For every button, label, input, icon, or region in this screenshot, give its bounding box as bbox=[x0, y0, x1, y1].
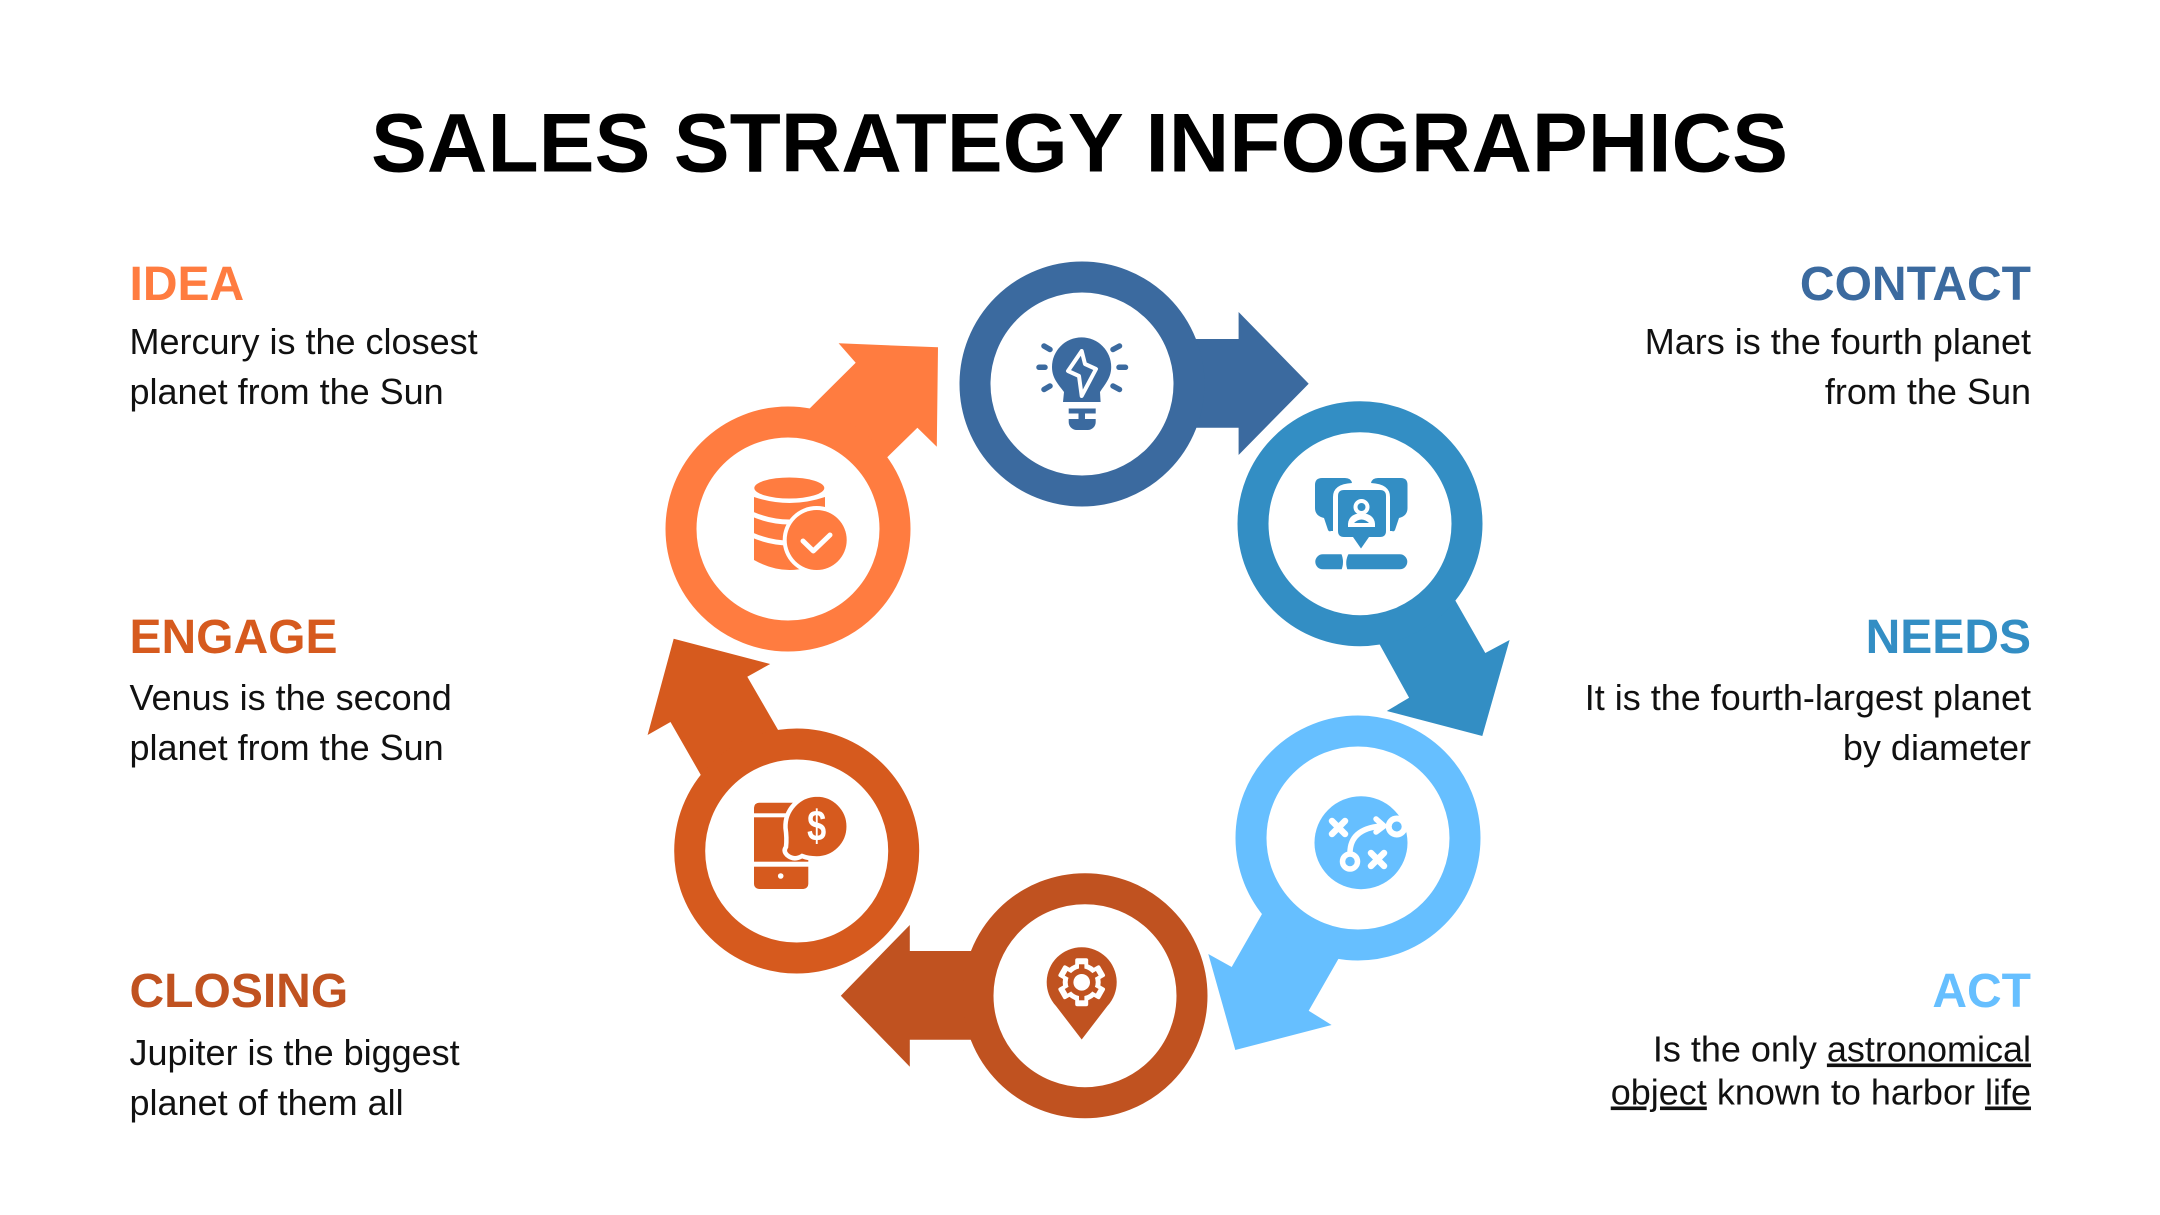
text block: needs bbox=[1585, 611, 2031, 768]
step: dark orange ring with arrow bbox=[648, 639, 904, 958]
step: orange ring with arrow bbox=[681, 343, 938, 636]
icon: database check bbox=[752, 478, 851, 574]
text block: closing: CLOSING bbox=[130, 965, 348, 1018]
text block: needs: by diameter bbox=[1843, 727, 2031, 768]
text block: idea: Mercury is the closest bbox=[130, 321, 478, 362]
text block: contact: CONTACT bbox=[1800, 258, 2031, 311]
icon: phone payment: $ bbox=[807, 802, 826, 851]
text block: closing: planet of them all bbox=[130, 1082, 404, 1123]
text block: needs: It is the fourth-largest planet bbox=[1585, 677, 2031, 718]
text block: act: object known to harbor life bbox=[1611, 1072, 2031, 1112]
text block: act: ACT bbox=[1932, 965, 2031, 1018]
icon: light bulb bbox=[1039, 337, 1126, 430]
text block: idea: IDEA bbox=[130, 258, 244, 311]
text block: act bbox=[1611, 965, 2031, 1112]
icon: strategy plan bbox=[1314, 796, 1408, 889]
icon: phone payment bbox=[752, 794, 849, 889]
icon: contact chat bbox=[1315, 478, 1408, 571]
step: light blue ring with arrow bbox=[1208, 731, 1465, 1050]
text block: idea: planet from the Sun bbox=[130, 371, 444, 412]
text block: contact bbox=[1645, 258, 2031, 412]
text block: engage: Venus is the second bbox=[130, 677, 452, 718]
text block: closing: Jupiter is the biggest bbox=[130, 1032, 460, 1073]
text block: engage: ENGAGE bbox=[130, 611, 338, 664]
step: brown ring with arrow bbox=[841, 889, 1192, 1103]
text block: engage bbox=[130, 611, 452, 768]
text block: needs: NEEDS bbox=[1866, 611, 2031, 664]
text block: act: Is the only astronomical bbox=[1653, 1028, 2031, 1070]
text block: contact: from the Sun bbox=[1825, 371, 2031, 412]
step: medium blue ring with arrow bbox=[1253, 417, 1510, 736]
text block: engage: planet from the Sun bbox=[130, 727, 444, 768]
text block: closing bbox=[130, 965, 460, 1123]
text block: idea bbox=[130, 258, 478, 412]
title: SALES STRATEGY INFOGRAPHICS bbox=[371, 96, 1788, 190]
text block: contact: Mars is the fourth planet bbox=[1645, 321, 2031, 362]
icon: location gear bbox=[1047, 947, 1117, 1040]
step: dark blue ring with arrow bbox=[975, 277, 1309, 491]
